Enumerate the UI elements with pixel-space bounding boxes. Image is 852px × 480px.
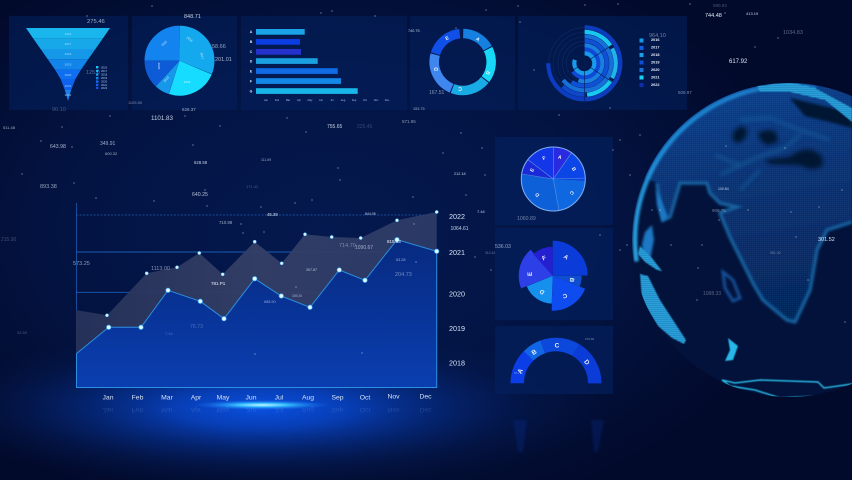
funnel: 2019 xyxy=(65,62,72,66)
bar labels: E xyxy=(250,70,253,74)
scattered data readouts: 212.18 xyxy=(454,172,466,176)
scattered data readouts: 710.98 xyxy=(219,220,233,225)
pie tiny labels xyxy=(157,36,205,84)
scattered data readouts: 600.32 xyxy=(105,151,118,156)
bar labels: B xyxy=(250,40,253,44)
scattered data readouts: 714.70 xyxy=(339,243,356,249)
pie tiny labels: 2020 xyxy=(157,63,161,70)
scattered data readouts: 45.39 xyxy=(267,212,278,217)
scattered data readouts: 509.97 xyxy=(678,90,692,95)
scattered data readouts xyxy=(1,3,835,375)
bar axis ticks: Oct xyxy=(363,99,367,102)
scattered data readouts: 32.50 xyxy=(17,330,28,335)
year axis labels: 2018 xyxy=(449,358,465,368)
donut labels: B xyxy=(484,70,491,76)
scattered data readouts: 571.95 xyxy=(402,119,416,124)
half ring letters: C xyxy=(555,342,560,349)
scattered data readouts: 893.38 xyxy=(40,184,57,190)
rose letters: F xyxy=(542,255,547,262)
half ring letters: D xyxy=(582,358,591,367)
scattered data readouts: 171.42 xyxy=(246,184,259,189)
month axis labels xyxy=(103,394,432,402)
outlined pie xyxy=(521,147,585,211)
radial legend: 2021 xyxy=(651,76,659,80)
scattered data readouts: 755.65 xyxy=(327,124,343,130)
globe xyxy=(632,83,852,397)
scattered data readouts: 397.87 xyxy=(306,268,317,272)
bar axis ticks: Jan xyxy=(264,99,269,102)
bar labels: A xyxy=(250,30,253,34)
scattered data readouts: 617.92 xyxy=(729,59,748,65)
donut labels: D xyxy=(434,67,440,71)
scattered data readouts: 58.66 xyxy=(212,44,226,50)
pie xyxy=(155,36,204,85)
half ring letters: B xyxy=(531,348,539,357)
bar axis ticks: May xyxy=(308,99,313,102)
star particles xyxy=(22,4,845,354)
panel: horizontal bar chart xyxy=(241,16,407,110)
month axis labels: Dec xyxy=(419,394,432,400)
chart frame and lower line xyxy=(76,240,437,388)
scattered data readouts: 744.48 xyxy=(705,13,722,19)
scattered data readouts: 536.03 xyxy=(495,244,511,250)
funnel: 2021 xyxy=(65,84,72,88)
month axis labels: Mar xyxy=(161,394,174,402)
pie letters: C xyxy=(568,189,575,196)
pie letters: F xyxy=(542,155,547,162)
radial bars xyxy=(541,20,628,107)
scattered data readouts: 628.58 xyxy=(194,160,208,165)
rose letters: D xyxy=(539,287,546,295)
arctic hatch band xyxy=(757,82,852,122)
scattered data readouts: 981.30 xyxy=(770,251,781,255)
lower line points xyxy=(106,238,439,329)
funnel: 2020 xyxy=(65,73,72,77)
bar labels: C xyxy=(250,50,253,54)
scattered data readouts: 349.91 xyxy=(100,141,116,147)
scattered data readouts: 225.46 xyxy=(357,124,373,130)
funnel legend: 2017 xyxy=(101,69,108,73)
scattered data readouts: 1064.61 xyxy=(450,226,469,232)
Antarctica xyxy=(722,380,852,398)
upper line points xyxy=(105,210,438,317)
scattered data readouts: 626.37 xyxy=(182,107,196,112)
scattered data readouts: 643.98 xyxy=(50,144,66,150)
bar axis ticks xyxy=(264,99,390,102)
month axis labels: Jun xyxy=(246,394,257,402)
scattered data readouts: 964.10 xyxy=(649,33,666,39)
scattered data readouts: 815.83 xyxy=(387,239,401,244)
scattered data readouts: 76.73 xyxy=(190,324,203,330)
scattered data readouts: 63.28 xyxy=(396,258,406,262)
month reflections xyxy=(103,406,432,413)
month axis labels: Jan xyxy=(103,394,114,402)
half ring letters xyxy=(516,342,591,375)
radial legend: 2019 xyxy=(651,60,659,64)
pie tiny labels: 2018 xyxy=(184,80,191,84)
rose letters: A xyxy=(562,254,569,262)
scattered data readouts: 275.46 xyxy=(87,19,105,25)
scattered data readouts: 740.75 xyxy=(408,29,420,33)
panel: semicircle chart xyxy=(495,326,613,438)
month reflections: Nov xyxy=(387,406,400,413)
scattered data readouts: 909.75 xyxy=(712,208,726,213)
scattered data readouts: 1101.83 xyxy=(151,115,173,122)
scattered data readouts: 1090.67 xyxy=(355,245,373,251)
scattered data readouts: 312.44 xyxy=(485,251,495,255)
scattered data readouts: 90.10 xyxy=(52,107,66,113)
month axis labels: Jul xyxy=(275,394,284,402)
inland seas xyxy=(732,127,823,169)
scattered data readouts: 276.84 xyxy=(585,337,595,341)
scattered data readouts: 413.19 xyxy=(746,11,759,16)
scattered data readouts: 781.P1 xyxy=(211,281,226,286)
pie tiny labels: 2021 xyxy=(161,39,168,47)
month axis labels: May xyxy=(217,394,230,402)
scattered data readouts: 573.25 xyxy=(73,261,90,267)
scattered data readouts: 125.0 xyxy=(86,70,100,76)
pie letters: E xyxy=(529,167,536,173)
scattered data readouts: 215.90 xyxy=(1,237,17,243)
scattered data readouts: 1105.50 xyxy=(128,100,143,105)
panel: donut chart xyxy=(410,16,515,110)
scattered data readouts: 1113.00 xyxy=(151,266,170,272)
year axis labels: 2022 xyxy=(449,212,465,221)
half ring xyxy=(501,328,611,438)
bar axis ticks: Feb xyxy=(275,99,280,102)
panel: exploded pie chart xyxy=(495,228,613,320)
year axis labels: 2019 xyxy=(449,324,465,333)
month reflections: May xyxy=(217,406,230,413)
month axis labels: Apr xyxy=(191,394,202,402)
pie tiny labels: 2017 xyxy=(199,52,205,60)
scattered data readouts: 1088.33 xyxy=(703,291,721,297)
rose chart xyxy=(530,253,575,298)
donut labels: C xyxy=(458,85,462,91)
funnel legend: 2019 xyxy=(101,76,108,80)
month reflections: Apr xyxy=(191,406,202,413)
radial legend: 2022 xyxy=(651,83,659,87)
scattered data readouts: 511.48 xyxy=(3,125,16,130)
month reflections: Aug xyxy=(302,406,314,413)
pie letters: A xyxy=(557,154,563,161)
pie tiny labels: 2019 xyxy=(163,75,170,83)
month reflections: Jan xyxy=(103,406,114,413)
radial legend xyxy=(640,38,659,87)
funnel legend: 2020 xyxy=(101,80,108,84)
west coast land xyxy=(642,188,668,260)
funnel: 2016 xyxy=(65,32,72,36)
islands: New Zealand xyxy=(725,338,738,361)
blue area xyxy=(76,240,437,387)
month reflections: Jul xyxy=(275,406,284,413)
scattered data readouts: 848.71 xyxy=(184,14,201,20)
month reflections: Sep xyxy=(331,406,344,413)
land masses xyxy=(640,60,852,322)
funnel: 2022 xyxy=(65,93,72,97)
year axis labels: 2020 xyxy=(449,290,465,298)
scattered data readouts: 339.26 xyxy=(292,294,302,298)
bar axis ticks: Jul xyxy=(330,99,334,102)
radial legend: 2016 xyxy=(651,38,659,42)
scattered data readouts: 111.69 xyxy=(261,158,271,162)
rose letters: C xyxy=(562,292,567,298)
bar labels: D xyxy=(250,60,253,64)
donut labels xyxy=(434,35,491,91)
radial legend: 2017 xyxy=(651,46,659,50)
month reflections: Jun xyxy=(246,406,257,413)
bar axis ticks: Sep xyxy=(352,99,357,102)
main area chart xyxy=(76,203,465,402)
funnel: 2018 xyxy=(65,52,72,56)
month axis labels: Oct xyxy=(360,394,370,402)
bar labels: F xyxy=(250,80,253,84)
scattered data readouts: 201.01 xyxy=(215,57,232,63)
funnel legend: 2021 xyxy=(101,83,108,87)
bar labels: G xyxy=(250,90,253,94)
year axis labels xyxy=(449,212,465,368)
pie tiny labels: 2016 xyxy=(186,36,194,43)
funnel: 2017 xyxy=(65,42,72,46)
scattered data readouts: 167.51 xyxy=(429,90,445,96)
scattered data readouts: 204.73 xyxy=(395,272,412,278)
bar axis ticks: Jun xyxy=(319,99,324,102)
scattered data readouts: 100.84 xyxy=(718,187,729,191)
scattered data readouts: 1060.89 xyxy=(517,216,536,222)
pie letters xyxy=(529,154,577,198)
scattered data readouts: 990.83 xyxy=(713,3,727,8)
funnel legend xyxy=(96,65,108,90)
scattered data readouts: 153.75 xyxy=(413,107,425,111)
bar axis ticks: Dec xyxy=(385,99,390,102)
month reflections: Feb xyxy=(132,406,144,413)
islands: Australia xyxy=(640,274,686,344)
rose letters: E xyxy=(528,272,534,276)
bar axis ticks: Mar xyxy=(286,99,290,102)
month axis labels: Sep xyxy=(331,394,344,402)
panel: right pie chart xyxy=(495,137,613,225)
month reflections: Oct xyxy=(360,406,370,413)
radial legend: 2020 xyxy=(651,68,659,72)
funnel legend: 2022 xyxy=(101,86,108,90)
radial legend: 2018 xyxy=(651,53,659,57)
pie letters: D xyxy=(534,191,541,198)
rose letters xyxy=(528,254,574,298)
lower panel reflections xyxy=(513,420,604,452)
scattered data readouts: 7.44 xyxy=(477,209,486,214)
grid lines xyxy=(76,203,437,387)
pie letters: B xyxy=(570,166,577,173)
scattered data readouts: 301.52 xyxy=(818,237,835,243)
month axis labels: Feb xyxy=(132,394,144,402)
scattered data readouts: 1034.83 xyxy=(783,30,803,36)
scattered data readouts: 640.25 xyxy=(192,192,208,198)
bar axis ticks: Apr xyxy=(297,99,301,102)
half ring letters: A xyxy=(516,367,525,375)
month reflections: Mar xyxy=(161,406,174,413)
rose letters: B xyxy=(568,277,574,283)
scattered data readouts: 551.90 xyxy=(514,371,524,375)
donut labels: A xyxy=(474,36,481,43)
bar axis ticks: Aug xyxy=(341,99,346,102)
panel: radial bar chart xyxy=(518,16,687,110)
funnel xyxy=(26,28,110,101)
Madagascar xyxy=(723,272,740,301)
month axis labels: Nov xyxy=(387,394,400,400)
bar axis ticks: Nov xyxy=(374,99,379,102)
bar labels xyxy=(250,30,253,94)
scattered data readouts: 7.44 xyxy=(165,331,174,336)
donut labels: E xyxy=(444,35,451,42)
floor light streak xyxy=(192,400,332,410)
bars xyxy=(256,29,358,94)
rim light xyxy=(632,83,817,264)
panel: pie chart xyxy=(132,16,237,110)
year axis labels: 2021 xyxy=(449,248,465,257)
scattered data readouts: 844.95 xyxy=(365,212,376,216)
grey range band xyxy=(76,212,437,354)
month axis labels: Aug xyxy=(302,394,314,402)
panel: funnel chart xyxy=(9,16,128,110)
scattered data readouts: 688.90 xyxy=(264,300,276,304)
funnel legend: 2018 xyxy=(101,73,108,77)
donut xyxy=(423,22,503,102)
month reflections: Dec xyxy=(419,406,432,413)
islands: New Guinea xyxy=(638,246,662,271)
funnel legend: 2016 xyxy=(101,65,108,69)
